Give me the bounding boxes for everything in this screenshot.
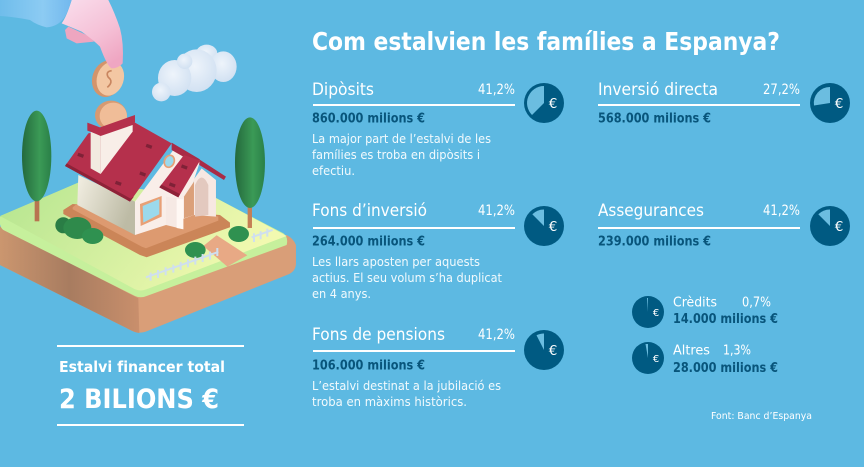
panel: Dipòsits: 860.000 milions € [312, 112, 425, 126]
panel: Altres [632, 342, 778, 376]
gable oval window [161, 153, 177, 170]
panel: Fons de pensions: L’estalvi destinat a la jubilació es [312, 379, 501, 393]
pie: Inversió directa [810, 83, 850, 123]
pie: Dipòsits [524, 83, 564, 123]
bushes [55, 217, 249, 258]
panel: Crèdits: Crèdits [673, 296, 717, 310]
panel: Fons d'inversió [312, 201, 564, 301]
panel: Assegurances: Assegurances [598, 201, 704, 220]
panel: Dipòsits: La major part de l’estalvi de les [312, 132, 491, 146]
pie: Inversió directa: € [835, 96, 843, 112]
roof shingles [77, 144, 188, 188]
garden path [203, 235, 247, 267]
panel: Crèdits: 0,7% [742, 296, 771, 310]
chimney with coin [87, 101, 135, 174]
panel: Fons d'inversió: actius. El seu volum s’ha duplicat [312, 271, 502, 285]
panel: Inversió directa: Inversió directa [598, 80, 718, 99]
pie: Assegurances [810, 206, 850, 246]
total value: 2 BILIONS € [59, 384, 219, 415]
pie: Fons d'inversió: € [549, 219, 557, 235]
pie: Fons d'inversió [524, 206, 564, 246]
panel: Fons d'inversió: en 4 anys. [312, 287, 371, 301]
platform base [0, 227, 296, 333]
panel: Fons d'inversió: Les llars aposten per aquests [312, 255, 480, 269]
cloud [152, 45, 237, 101]
fences [146, 229, 273, 281]
house [63, 101, 230, 257]
panel: Fons de pensions: 106.000 milions € [312, 358, 425, 374]
panel: Fons de pensions: 41,2% [478, 327, 515, 343]
panel: Fons d'inversió: Fons d’inversió [312, 201, 427, 220]
red roof [65, 123, 226, 202]
pie: Altres [632, 342, 664, 374]
panel: Dipòsits: efectiu. [312, 164, 355, 178]
illustration: house on island with hand dropping coin [0, 0, 296, 333]
panel: Altres: Altres [673, 344, 710, 358]
panel: Dipòsits: 41,2% [478, 82, 515, 98]
left tree [22, 111, 51, 221]
house walls [77, 150, 216, 235]
pie: Dipòsits: € [549, 96, 557, 112]
total savings box [57, 346, 244, 425]
panel: Fons de pensions: troba en màxims històrics. [312, 395, 467, 409]
title: Com estalvien les famílies a Espanya? [312, 27, 780, 56]
panel: Fons d'inversió: 264.000 milions € [312, 234, 425, 250]
panel: Dipòsits [312, 80, 564, 178]
house steps [63, 204, 230, 257]
pie: Crèdits [632, 296, 664, 328]
panel: Crèdits [632, 296, 778, 328]
pie: Assegurances: € [835, 219, 843, 235]
total label: Estalvi financer total [59, 358, 225, 376]
panel: Fons de pensions: Fons de pensions [312, 325, 445, 344]
panel: Inversió directa [598, 80, 850, 126]
right tree [235, 117, 265, 228]
panel: Dipòsits: famílies es troba en dipòsits i [312, 148, 480, 162]
panel: Inversió directa: 568.000 milions € [598, 112, 711, 126]
panel: Assegurances [598, 201, 850, 250]
panel: Crèdits: 14.000 milions € [673, 312, 778, 327]
window [140, 196, 162, 226]
panel: Inversió directa: 27,2% [763, 82, 800, 98]
panel: Altres: 1,3% [723, 344, 751, 358]
grass top [0, 183, 287, 297]
falling coin [87, 56, 128, 101]
panel: Assegurances: 239.000 milions € [598, 234, 711, 250]
panel: Altres: 28.000 milions € [673, 361, 778, 376]
hand and sleeve [0, 0, 123, 68]
source note: Font: Banc d’Espanya [711, 411, 812, 422]
panel: Fons d'inversió: 41,2% [478, 203, 515, 219]
pie: Altres: € [653, 354, 659, 365]
pie: Fons de pensions [524, 330, 564, 370]
panel: Dipòsits: Dipòsits [312, 80, 374, 99]
pie: Crèdits: € [653, 308, 659, 319]
panel: Fons de pensions [312, 325, 564, 409]
panel: Assegurances: 41,2% [763, 203, 800, 219]
pie: Fons de pensions: € [549, 343, 557, 359]
